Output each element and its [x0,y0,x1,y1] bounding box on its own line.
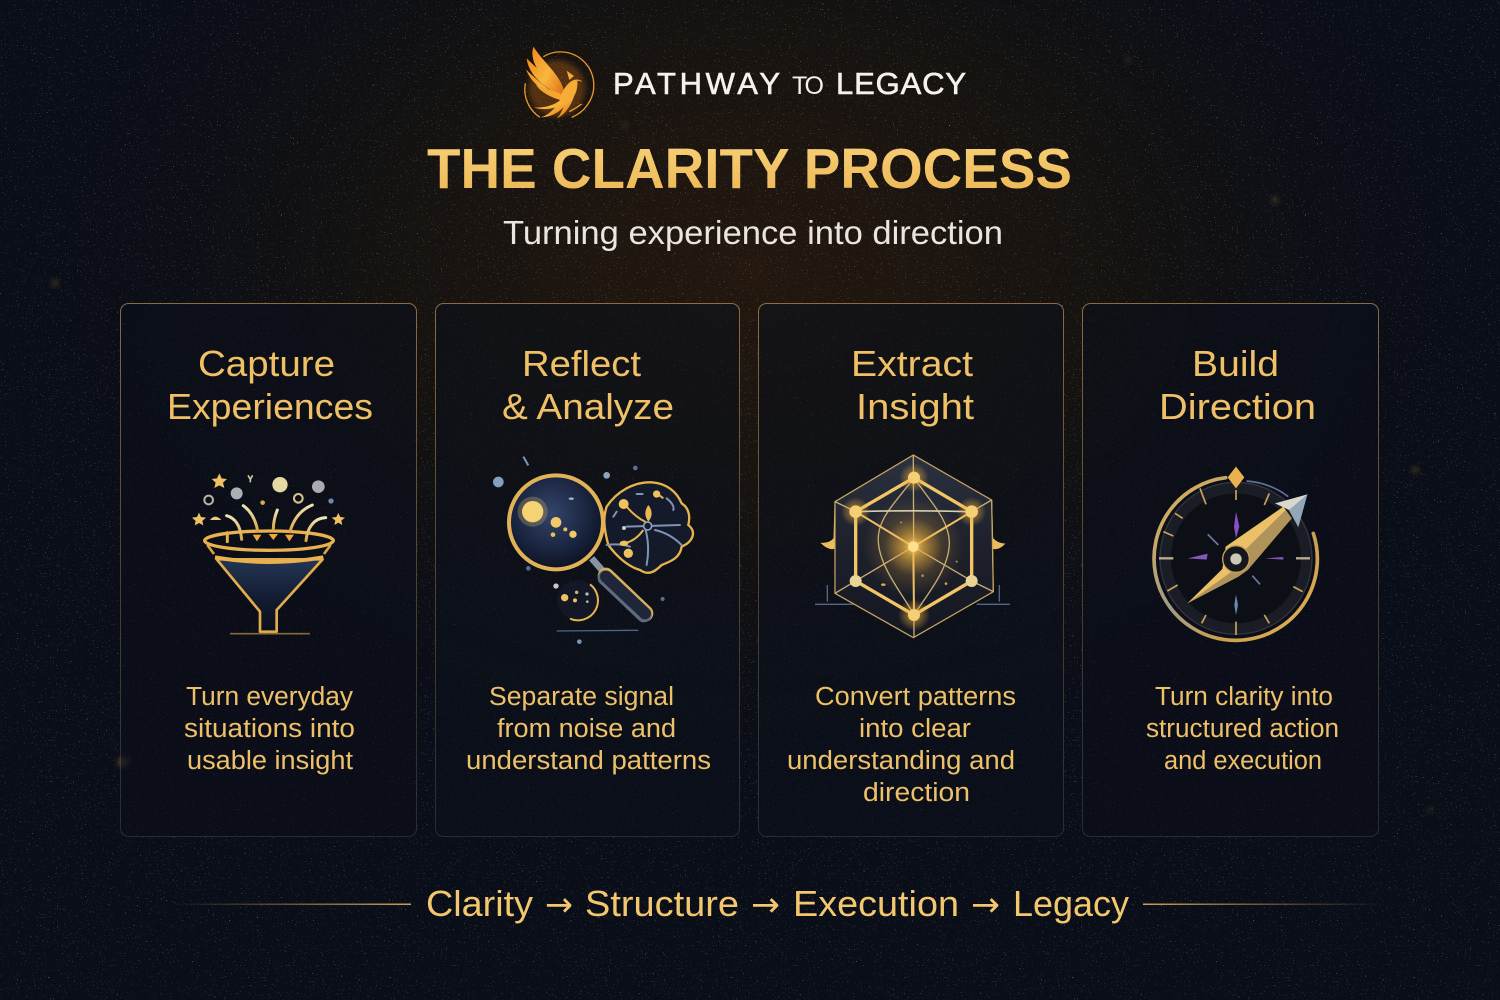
footer: progression line: Structure [585,883,739,924]
icon: compass [1154,467,1317,640]
icon: glowing hexagon [815,455,1010,638]
footer: progression line: → [971,885,1000,925]
icon: funnel [192,473,345,634]
brand name [613,66,966,101]
description: build: structured action [1146,715,1339,743]
title: THE CLARITY PROCESS [427,137,1072,201]
heading: extract insight: Extract [851,343,973,384]
description: extract: understanding and [787,747,1015,775]
panel: capture experiences [120,304,416,836]
description: build [1146,683,1339,775]
description: capture: usable insight [187,747,353,775]
heading: build direction [1159,343,1316,427]
footer: progression line: Clarity [426,883,533,924]
brand name: PATHWAY [613,66,780,101]
description: capture [184,683,355,775]
heading: extract insight: Insight [856,386,974,427]
heading: reflect and analyze: Reflect [522,343,641,384]
panel: reflect and analyze [436,304,740,836]
description: reflect: from noise and [497,715,676,743]
description: build: and execution [1164,747,1322,775]
description: capture: Turn everyday [186,683,353,711]
panel: extract insight [758,304,1064,836]
heading: build direction: Direction [1159,386,1316,427]
icon: magnifier and brain [493,457,693,644]
footer: progression line: → [751,885,780,925]
description: extract: into clear [859,715,972,743]
description: extract [787,683,1016,807]
heading: reflect and analyze [502,343,674,427]
heading: extract insight [851,343,974,427]
heading: build direction: Build [1192,343,1279,384]
heading: capture experiences [167,343,373,427]
footer: progression line: Legacy [1013,883,1129,924]
brand name: TO [792,72,824,100]
subtitle: Turning experience into direction [503,214,1003,251]
heading: reflect and analyze: & Analyze [502,386,674,427]
description: reflect [466,683,711,775]
description: reflect: Separate signal [489,683,674,711]
brand name: LEGACY [836,66,966,101]
description: extract: Convert patterns [815,683,1016,711]
heading: capture experiences: Experiences [167,386,373,427]
description: reflect: understand patterns [466,747,711,775]
footer: progression line [170,883,1385,925]
footer: progression line: → [545,885,573,925]
logo: phoenix emblem [525,47,594,118]
footer: progression line: Execution [793,883,959,924]
heading: capture experiences: Capture [198,343,335,384]
description: capture: situations into [184,715,355,743]
description: extract: direction [863,779,970,807]
description: build: Turn clarity into [1155,683,1333,711]
panel: build direction [1082,304,1378,836]
